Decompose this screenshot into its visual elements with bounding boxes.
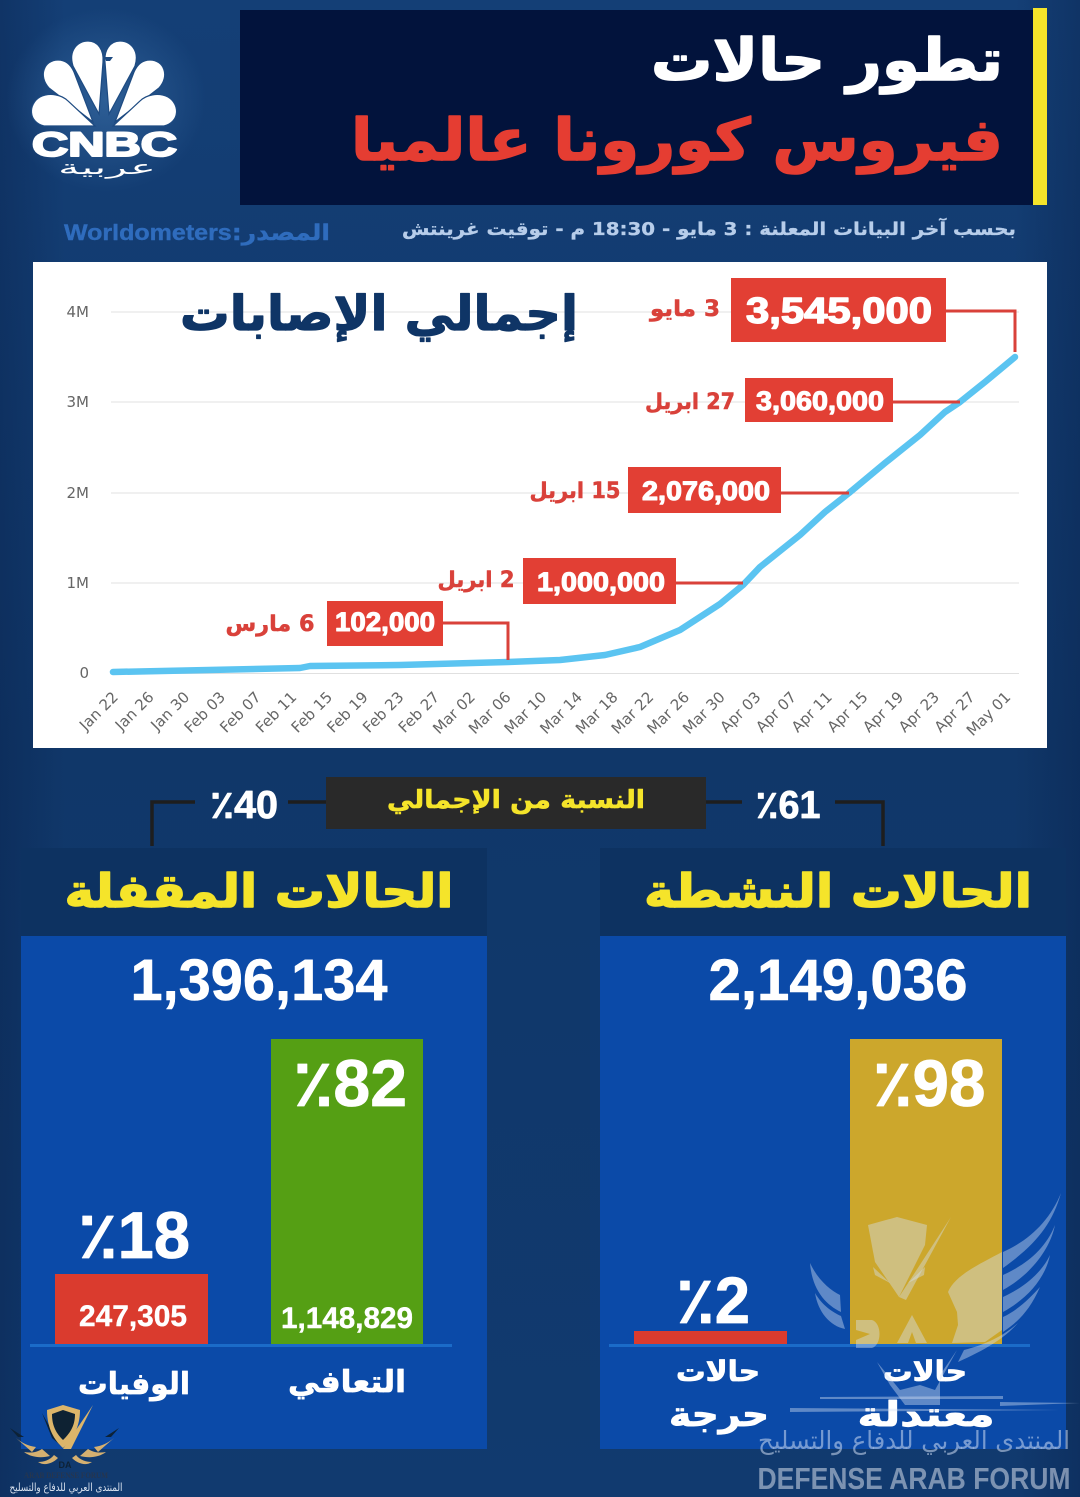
title panel: تطور حالات (651, 26, 1003, 95)
callout: 6 March: 6 مارس (226, 612, 314, 637)
callout: 27 April: 3,060,000 (756, 386, 884, 416)
panel: active cases: حرجة (669, 1395, 769, 1435)
logo glow (6, 8, 206, 192)
forum emblem: المنتدى العربي للدفاع والتسليح (10, 1481, 122, 1494)
share of total connector: ٪61 (756, 784, 820, 827)
x axis date labels: Mar 18 (572, 688, 622, 738)
curve (113, 357, 1015, 672)
y axis labels: 3M (66, 393, 89, 411)
chart title: إجمالي الإصابات (180, 286, 578, 342)
callout: 2 April: 2 ابريل (438, 568, 514, 593)
x axis date labels: Apr 07 (752, 688, 800, 736)
x axis date labels: Mar 26 (643, 688, 693, 738)
panel: active cases (600, 848, 1066, 1449)
forum emblem (10, 1405, 122, 1494)
x axis date labels: Feb 07 (216, 688, 265, 736)
share of total connector (152, 777, 883, 846)
x axis date labels: Mar 14 (536, 688, 586, 738)
x axis date labels: Feb 27 (395, 688, 443, 736)
y axis labels: 4M (66, 303, 89, 321)
line chart: total cases (33, 262, 1047, 748)
x axis date labels: Mar 22 (608, 688, 657, 738)
callout: 3 May: 3,545,000 (746, 290, 932, 331)
x axis date labels: Feb 03 (181, 688, 229, 736)
x axis date labels: May 01 (963, 688, 1014, 740)
callout: 3 May: 3 مايو (649, 297, 720, 322)
panel: active cases: حالات (883, 1355, 967, 1388)
x axis date labels: Feb 15 (288, 688, 336, 736)
y axis labels: 1M (66, 574, 89, 592)
callout: 27 April (645, 378, 960, 422)
panel: active cases: ٪98 (872, 1046, 986, 1120)
x axis date labels: Jan 26 (111, 688, 158, 735)
callout: 3 May (649, 278, 1015, 352)
watermark: Defense Arab Forum: المنتدى العربي للدفاع والتسليح (758, 1426, 1070, 1456)
x axis date labels: Mar 06 (465, 688, 515, 738)
callout: 15 April: 2,076,000 (642, 476, 770, 506)
source note: المصدر:Worldometers (64, 220, 330, 246)
CNBC Arabia logo (31, 41, 177, 179)
x axis date labels: Jan 30 (147, 688, 193, 735)
callout: 2 April: 1,000,000 (537, 567, 665, 597)
panel: closed cases: 247,305 (79, 1300, 187, 1333)
callout: 15 April (530, 467, 849, 513)
y axis labels: 2M (66, 484, 89, 502)
callout: 6 March: 102,000 (335, 607, 435, 637)
share of total connector: ٪40 (210, 784, 278, 827)
x axis date labels: Mar 10 (501, 688, 550, 738)
x axis date labels: Jan 22 (75, 688, 122, 735)
callout: 2 April (438, 558, 743, 604)
callout: 27 April: 27 ابريل (645, 390, 735, 415)
watermark: Defense Arab Forum (758, 1193, 1080, 1496)
x axis date labels: Feb 19 (323, 688, 372, 736)
x axis date labels: Apr 27 (931, 688, 979, 736)
forum emblem: DA (58, 1460, 72, 1470)
panel: active cases: ٪2 (676, 1263, 750, 1337)
panel: closed cases: ٪18 (78, 1198, 190, 1272)
y axis labels (66, 303, 89, 682)
panel: closed cases: 1,148,829 (281, 1302, 413, 1335)
panel: active cases: الحالات النشطة (644, 864, 1032, 918)
panel: closed cases: الحالات المقفلة (64, 864, 454, 918)
CNBC Arabia logo: عربية (58, 157, 156, 179)
share of total connector: النسبة من الإجمالي (387, 785, 645, 815)
x axis date labels: Apr 03 (716, 688, 764, 736)
panel: closed cases: الوفيات (78, 1367, 190, 1402)
panel: closed cases: 1,396,134 (130, 948, 388, 1013)
CNBC Arabia logo: CNBC (32, 126, 177, 164)
panel: active cases: معتدلة (858, 1395, 994, 1435)
title panel: فيروس كورونا عالميا (351, 106, 1003, 175)
x axis date labels: Feb 11 (252, 688, 300, 736)
x axis date labels: Mar 02 (429, 688, 479, 738)
callout: 6 March (226, 601, 508, 660)
x axis date labels: Mar 30 (679, 688, 729, 738)
panel: closed cases (21, 848, 487, 1449)
x axis date labels (75, 688, 1014, 740)
title panel (240, 8, 1047, 205)
x axis date labels: Feb 23 (359, 688, 407, 736)
y axis labels: 0 (79, 664, 89, 682)
panel: active cases: 2,149,036 (708, 948, 968, 1013)
panel: closed cases: التعافي (288, 1365, 406, 1400)
x axis date labels: Apr 23 (895, 688, 943, 736)
x axis date labels: Apr 11 (788, 688, 836, 736)
panel: closed cases: ٪82 (293, 1046, 407, 1120)
x axis date labels: Apr 19 (859, 688, 907, 736)
panel: active cases: حالات (676, 1355, 760, 1388)
callout: 15 April: 15 ابريل (530, 479, 620, 504)
forum emblem: ARAB DEFENSE FORUM (24, 1471, 108, 1480)
data timestamp note: بحسب آخر البيانات المعلنة : 3 مايو - 18:30 م - توقيت غرينتش (402, 217, 1016, 240)
x axis date labels: Apr 15 (824, 688, 872, 736)
